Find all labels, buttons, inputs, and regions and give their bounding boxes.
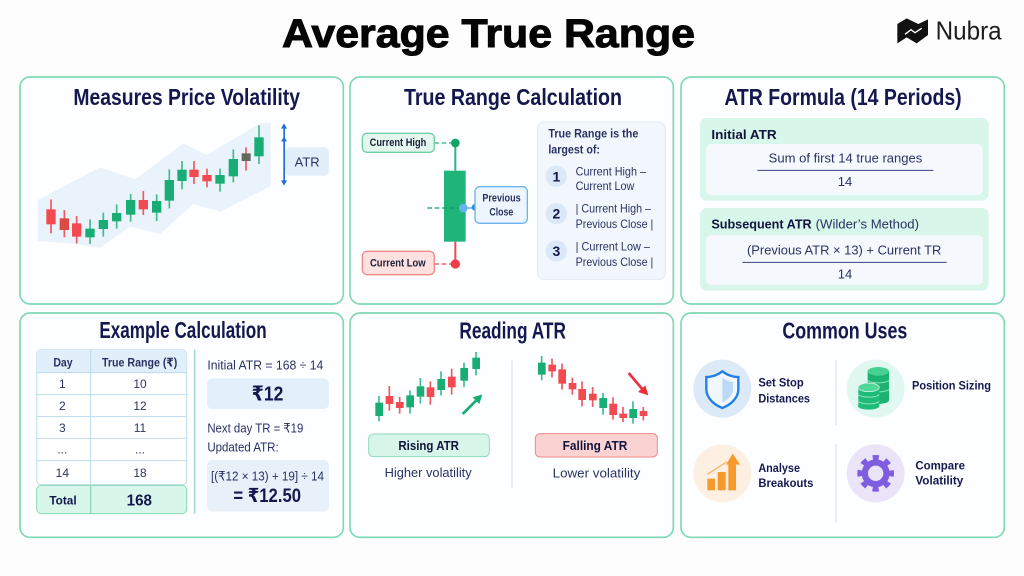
true range rules [538,122,665,279]
formula: initial ATR: Initial ATR [711,127,777,142]
panel: common uses [681,313,1004,537]
true range rules: 3 [552,243,560,259]
label: previous close: Previous [482,192,521,204]
true range rules: Previous Close | [576,218,653,231]
label: rising ATR: Rising ATR [398,438,460,453]
label: previous close: Close [489,206,513,218]
ATR label: ATR [295,154,320,169]
use: analyse breakouts: Analyse [758,461,800,475]
formula: subsequent ATR: (Wilder’s Method) [816,216,919,231]
initial ATR result: Initial ATR = 168 ÷ 14 [207,357,323,372]
logo: Nubra: Nubra [936,15,1002,45]
use: set stop distances [693,360,810,418]
label: current low: Current Low [370,258,426,270]
title: Average True Range [282,12,695,56]
formula: subsequent ATR: 14 [838,266,852,281]
true range rules: Current High – [576,165,646,178]
updated ATR result [207,421,329,511]
formula: subsequent ATR [700,208,989,291]
label: rising ATR [369,434,489,480]
true range rules: | Current High – [576,203,651,216]
label: current high [362,133,434,152]
data table: 3 [59,421,66,435]
heading: example calculation: Example Calculation [99,317,267,343]
label: falling ATR [535,434,657,481]
formula: initial ATR: 14 [838,174,852,189]
use: compare volatility: Volatility [915,474,963,488]
logo: Nubra [897,15,1002,45]
panel: ATR formula [681,77,1004,304]
arrow: falling [629,373,648,395]
updated ATR result: = ₹12.50 [233,486,301,507]
data table: 18 [133,466,147,480]
ATR range arrow [281,123,287,186]
heading: common uses: Common Uses [782,318,907,344]
panel: measures price volatility [20,77,343,304]
candle diagram [427,139,478,269]
data table: 168 [127,493,152,510]
label: falling ATR: Lower volatility [553,466,641,481]
panel: reading ATR [350,313,673,537]
data table: Day [53,355,73,369]
use: analyse breakouts: Breakouts [758,476,813,490]
true range rules: largest of: [548,142,600,156]
true range rules: 2 [552,206,560,222]
formula: initial ATR: Sum of first 14 true ranges [769,150,923,165]
true range rules: True Range is the [548,126,638,140]
data table: ... [57,443,67,457]
heading: measures price volatility: Measures Price Volatility [73,84,300,110]
ATR label [285,147,329,176]
label: current high: Current High [370,137,426,149]
data table [37,350,187,514]
use: analyse breakouts [693,444,813,502]
data table: 1 [59,377,66,391]
true range rules: Current Low [576,180,635,193]
arrow: rising [463,394,482,414]
true range rules: Previous Close | [576,256,653,269]
volatility band [38,123,271,248]
panel: true range calculation [350,77,673,304]
updated ATR result: [(₹12 × 13) + 19] ÷ 14 [211,468,324,483]
data table: 2 [59,399,66,413]
rising candles [375,352,480,421]
use: position sizing [847,360,991,418]
data table: 10 [133,377,147,391]
panel: example calculation [20,313,343,537]
data table: ... [135,443,145,457]
label: rising ATR: Higher volatility [385,465,472,480]
label: previous close [475,187,527,223]
data table: Total [49,494,77,508]
falling candles [538,356,647,424]
use: compare volatility [847,444,965,502]
heading: ATR formula: ATR Formula (14 Periods) [724,84,962,110]
heading: true range calculation: True Range Calculation [404,84,622,110]
heading: reading ATR: Reading ATR [459,318,566,344]
data table: 11 [134,421,147,435]
data table: True Range (₹) [102,355,177,369]
formula: subsequent ATR: (Previous ATR × 13) + Current TR [747,243,941,258]
initial ATR result: ₹12 [252,383,283,406]
initial ATR result [207,357,329,409]
use: set stop distances: Set Stop [758,376,804,390]
updated ATR result: Next day TR = ₹19 [207,421,303,436]
true range rules: | Current Low – [576,241,650,254]
formula: initial ATR [700,118,989,201]
formula: subsequent ATR: Subsequent ATR [711,216,812,231]
use: position sizing: Position Sizing [912,379,991,393]
use: set stop distances: Distances [758,391,810,405]
true range rules: 1 [552,168,560,184]
use: compare volatility: Compare [915,458,965,472]
updated ATR result: Updated ATR: [207,439,279,454]
data table: 14 [56,466,69,480]
candlestick chart [46,125,264,244]
label: current low [362,251,434,275]
label: falling ATR: Falling ATR [563,438,628,453]
data table: 12 [133,399,147,413]
